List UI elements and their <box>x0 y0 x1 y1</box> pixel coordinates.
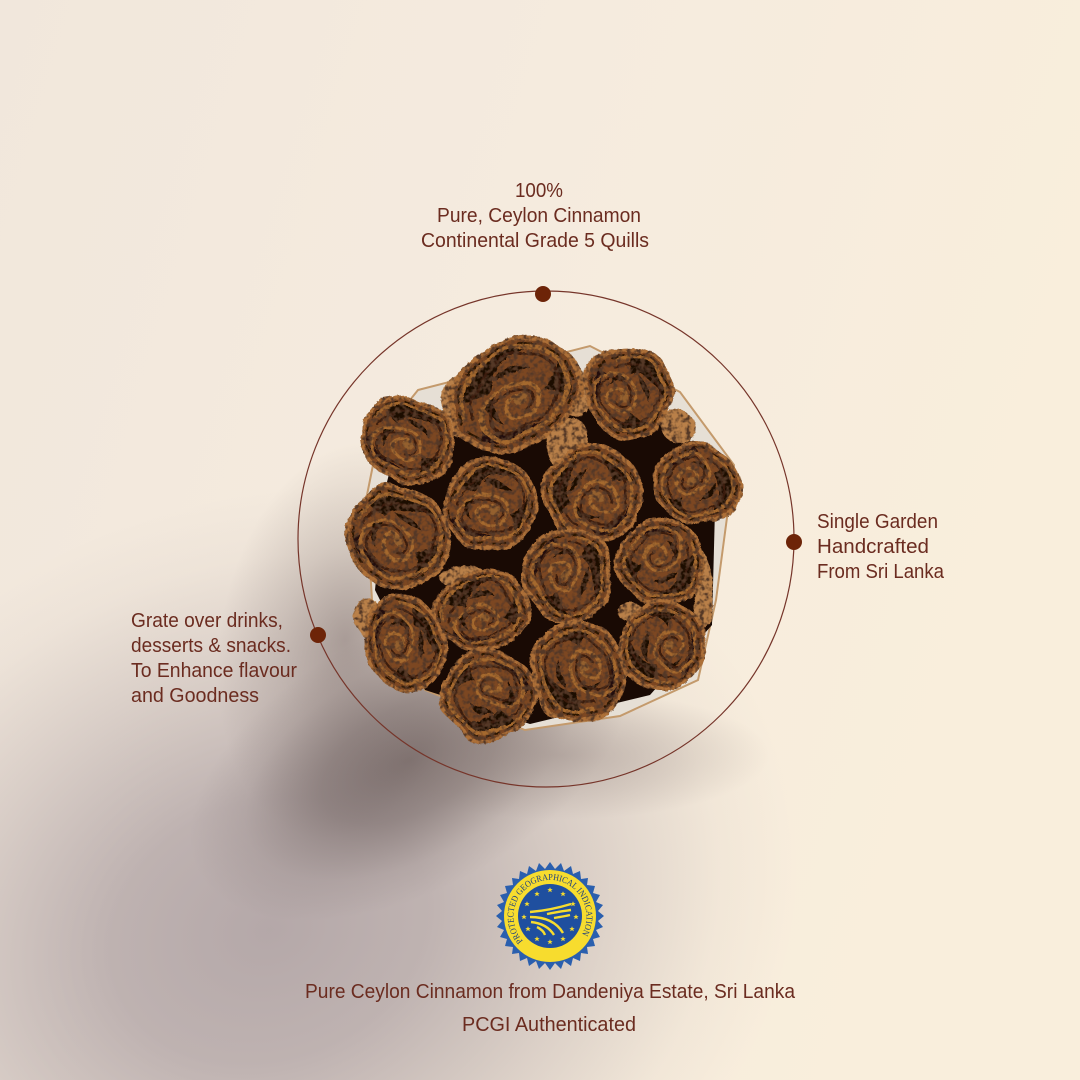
quill: bottom right <box>611 594 715 698</box>
quill: bottom centre <box>516 607 642 737</box>
quill: top left <box>343 377 473 503</box>
PGI badge <box>496 862 604 970</box>
text: right label: From Sri Lanka <box>817 561 945 583</box>
text: bottom caption: Pure Ceylon Cinnamon from Dandeniya Estate, Sri Lanka <box>305 981 796 1003</box>
quill: lower left <box>357 586 453 700</box>
quill: lower left centre <box>427 563 535 659</box>
text: top label: Pure, Ceylon Cinnamon <box>437 205 641 227</box>
text: top label: Continental Grade 5 Quills <box>421 230 649 252</box>
quill: bottom left <box>429 635 549 755</box>
text: left label: desserts & snacks. <box>131 635 291 657</box>
ring circle <box>298 291 794 787</box>
text: left label: and Goodness <box>131 685 259 707</box>
quill: top large <box>427 314 603 474</box>
fields <box>530 904 571 935</box>
cinnamon quill bundle <box>327 314 755 755</box>
text: top label: 100% <box>515 180 563 202</box>
text: left label: To Enhance flavour <box>131 660 297 682</box>
quill: right <box>639 427 755 541</box>
quill: top right <box>570 332 686 452</box>
quill: centre <box>525 425 661 561</box>
text: left label <box>131 610 297 707</box>
text: top label <box>421 180 649 252</box>
quill: centre left <box>435 447 547 559</box>
quill: right lower <box>601 502 721 622</box>
text: left label: Grate over drinks, <box>131 610 283 632</box>
marker dot: top <box>535 286 551 302</box>
PGI badge: PROTECTED GEOGRAPHICAL INDICATION <box>508 874 592 945</box>
text: right label: Handcrafted <box>817 536 929 558</box>
dark centre <box>375 375 716 724</box>
blue serrated edge <box>496 862 604 970</box>
text: right label <box>817 511 945 583</box>
quill: middle <box>514 520 622 630</box>
text: right label: Single Garden <box>817 511 938 533</box>
paper wrap <box>366 346 734 730</box>
marker dot: left <box>310 627 326 643</box>
quill backs <box>354 346 712 638</box>
marker dot: right <box>786 534 802 550</box>
text: bottom caption: PCGI Authenticated <box>462 1014 636 1036</box>
stars <box>521 887 579 944</box>
text: bottom caption <box>305 981 796 1036</box>
quill: far left <box>327 468 469 606</box>
ring lettering <box>514 880 586 941</box>
